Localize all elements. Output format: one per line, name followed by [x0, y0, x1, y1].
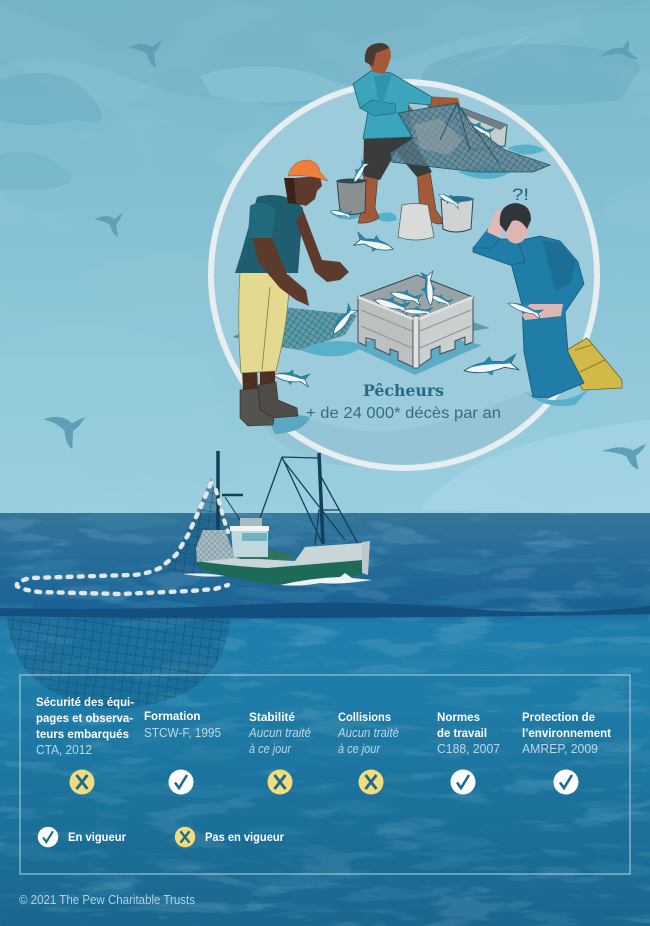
text: deaths per year: + de 24 000* décès par an [306, 405, 501, 422]
column: labour standards [437, 710, 500, 794]
hair [500, 203, 531, 232]
column: stability: à ce jour [249, 742, 292, 756]
column: labour standards: de travail [437, 726, 487, 740]
illustration: man in orange cap [235, 160, 349, 434]
column: crew safety [36, 695, 134, 794]
masts and rigging [216, 451, 220, 532]
column: collisions [337, 710, 399, 794]
column: training: STCW-F, 1995 [144, 726, 221, 740]
hull white band [197, 543, 363, 568]
column: crew safety: CTA, 2012 [36, 743, 92, 757]
column: training: Formation [144, 709, 200, 723]
shorts [363, 136, 432, 180]
illustration: kneeling man [463, 185, 622, 406]
head [367, 43, 391, 74]
panel: fishers circle [211, 82, 597, 468]
sea background [0, 513, 650, 926]
cabin [231, 527, 268, 557]
boots [562, 338, 622, 390]
column: labour standards: Normes [437, 710, 480, 724]
water puddles [330, 144, 545, 222]
hull green [197, 560, 368, 585]
fish in crate [461, 116, 496, 141]
arm holding net [425, 96, 460, 108]
column: environmental protection [522, 710, 611, 794]
trousers [239, 272, 289, 373]
wake [280, 573, 372, 586]
column: collisions: à ce jour [338, 742, 381, 756]
illustration: net floats on the boat side [216, 490, 228, 532]
column: stability: Aucun traité [248, 726, 311, 740]
illustration: top fisherman with net and crate [330, 43, 550, 224]
neck and hair [284, 178, 302, 205]
overalls [508, 236, 584, 398]
legs [242, 368, 275, 392]
right leg [417, 170, 444, 224]
illustration: submerged net [7, 616, 230, 709]
question marks: ?! [512, 185, 529, 204]
face [505, 218, 527, 244]
copyright: © 2021 The Pew Charitable Trusts [19, 893, 195, 907]
illustration: net floats [17, 483, 228, 594]
cap [288, 160, 328, 181]
illustration: net on ground by man in cap [233, 302, 490, 388]
arms [253, 238, 309, 306]
column: environmental protection: AMREP, 2009 [522, 742, 598, 756]
forearm and hands with fish [520, 304, 563, 320]
illustration: fishing boat [165, 451, 372, 586]
icon: birds in the sky [39, 40, 646, 469]
legend [38, 827, 284, 847]
column: crew safety: teurs embarqués [36, 727, 129, 741]
boots [258, 382, 298, 418]
icon: buckets and fish on the ground [329, 159, 473, 257]
shirt [353, 70, 432, 139]
column: environmental protection: l’environnement [522, 726, 611, 740]
shirt [235, 195, 303, 273]
stern net pile [196, 530, 235, 562]
column: stability [248, 710, 311, 794]
legend: Pas en vigueur [205, 830, 284, 844]
illustration: central crate of fish [350, 271, 482, 375]
legend: En vigueur [68, 830, 126, 844]
crate behind net [455, 108, 507, 150]
column: stability: Stabilité [249, 710, 295, 724]
heading: fishers: Pêcheurs [363, 381, 444, 400]
deck net [238, 548, 295, 559]
column: crew safety: Sécurité des équi- [36, 695, 134, 709]
sky background [0, 0, 650, 514]
column: collisions: Aucun traité [337, 726, 399, 740]
column: crew safety: pages et observa- [36, 711, 133, 725]
column: labour standards: C188, 2007 [437, 742, 500, 756]
hand on head [487, 209, 506, 238]
panel: treaty status [20, 675, 630, 874]
left leg [358, 172, 379, 223]
column: collisions: Collisions [338, 710, 391, 724]
column: training [144, 709, 221, 794]
column: environmental protection: Protection de [522, 710, 595, 724]
net hanging [165, 478, 232, 575]
net [390, 103, 550, 172]
face [294, 176, 322, 206]
